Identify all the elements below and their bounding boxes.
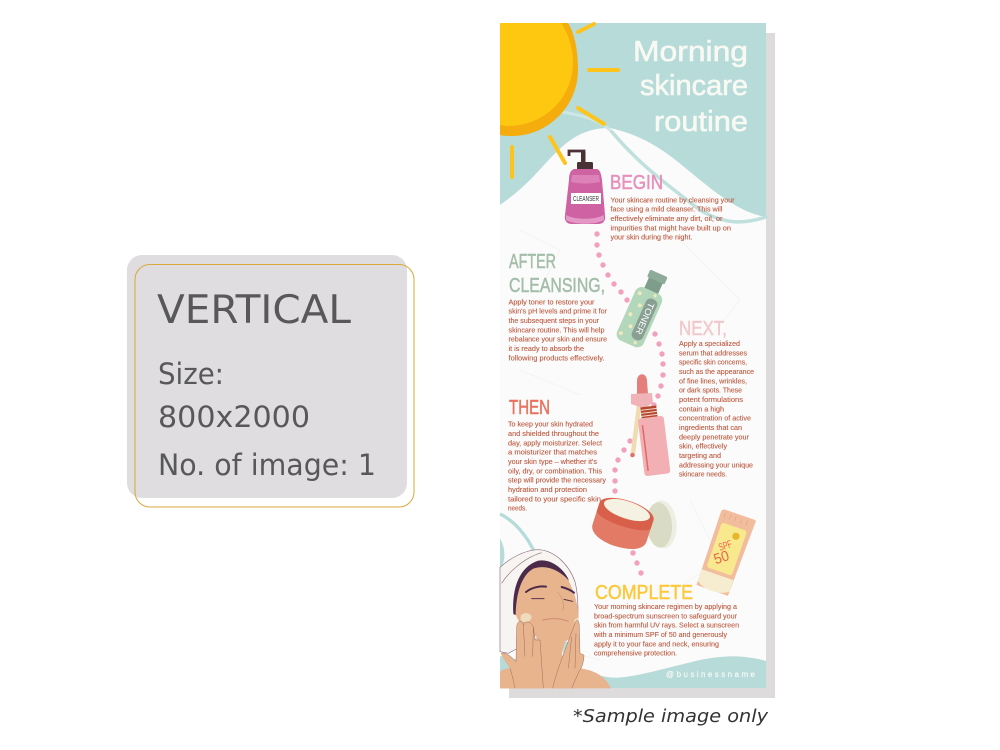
sun rays bbox=[512, 24, 618, 177]
next body text: skincare needs. bbox=[679, 470, 727, 479]
next body text: Apply a specialized bbox=[679, 339, 740, 348]
then body text: a moisturizer that matches bbox=[508, 448, 597, 457]
next body text: contain a high bbox=[679, 404, 724, 413]
towel bbox=[500, 550, 578, 653]
then body text: needs. bbox=[508, 504, 527, 513]
icon: serum dropper bottle bbox=[630, 374, 671, 476]
step: begin bbox=[610, 172, 735, 242]
card heading: VERTICAL bbox=[157, 288, 351, 333]
complete body text: with a minimum SPF of 50 and generously bbox=[593, 630, 727, 639]
panel shadow bbox=[509, 33, 775, 698]
icon: toner bottle: TONER bbox=[633, 301, 656, 337]
begin heading: BEGIN bbox=[610, 172, 663, 194]
left hand bbox=[500, 621, 543, 688]
then body text: day, apply moisturizer. Select bbox=[508, 438, 602, 447]
then body text: and shielded throughout the bbox=[508, 429, 599, 438]
card background bbox=[127, 255, 407, 498]
icon: SPF 50 sunscreen tube bbox=[696, 509, 756, 597]
begin body text: face using a mild cleanser. This will bbox=[610, 205, 723, 214]
paper creases bbox=[520, 230, 740, 660]
after cleansing body text: skincare routine. This will help bbox=[508, 325, 604, 334]
panel paper background bbox=[500, 23, 766, 688]
icon: SPF 50 sunscreen tube: 50 bbox=[712, 548, 731, 568]
title: Morning bbox=[633, 36, 748, 68]
after cleansing body text: the subsequent steps in your bbox=[508, 316, 600, 325]
icon: SPF 50 sunscreen tube: SPF bbox=[717, 538, 734, 554]
after cleansing heading: AFTER bbox=[509, 251, 556, 273]
title bbox=[633, 36, 748, 138]
next body text: deeply penetrate your bbox=[679, 432, 750, 441]
after cleansing heading: CLEANSING, bbox=[509, 275, 605, 297]
complete body text: skin from harmful UV rays. Select a sunscreen bbox=[594, 621, 739, 630]
complete body text: comprehensive protection. bbox=[594, 649, 677, 658]
next body text: concentration of active bbox=[679, 414, 751, 423]
after cleansing body text: Apply toner to restore your bbox=[508, 297, 595, 306]
complete heading: COMPLETE bbox=[595, 582, 693, 604]
after cleansing body text: skin's pH levels and prime it for bbox=[508, 307, 608, 316]
step: next bbox=[679, 318, 754, 479]
card gold outline bbox=[135, 264, 414, 507]
size value: 800x2000 bbox=[158, 400, 310, 434]
title: skincare bbox=[640, 70, 748, 102]
left hand lines bbox=[501, 621, 543, 688]
dotted path bbox=[594, 231, 666, 576]
step: after cleansing bbox=[508, 251, 608, 362]
begin body text bbox=[610, 195, 735, 242]
size label: Size: bbox=[158, 357, 224, 391]
complete body text: apply it to your face and neck, ensuring bbox=[594, 639, 719, 648]
complete body text: Your morning skincare regimen by applying a bbox=[594, 602, 737, 611]
begin body text: effectively eliminate any dirt, oil, or bbox=[610, 214, 723, 223]
next body text: targeting and bbox=[679, 451, 721, 460]
next body text: skin, effectively bbox=[679, 442, 727, 451]
title: routine bbox=[654, 106, 748, 138]
begin body text: your skin during the night. bbox=[610, 233, 692, 242]
next body text: addressing your unique bbox=[679, 460, 753, 469]
image count: No. of image: 1 bbox=[158, 448, 376, 482]
left teal side bbox=[500, 538, 504, 570]
sun inner disc bbox=[500, 23, 573, 126]
complete body text bbox=[593, 602, 739, 658]
step: complete bbox=[593, 582, 739, 658]
hair bbox=[513, 560, 569, 615]
step: then bbox=[508, 397, 606, 513]
neck and shoulders bbox=[500, 635, 611, 688]
sky teal area bbox=[500, 23, 766, 217]
after cleansing heading bbox=[509, 251, 605, 297]
sun bbox=[500, 23, 618, 177]
cream patches bbox=[521, 613, 578, 625]
next body text: or dark spots. These bbox=[679, 386, 742, 395]
next body text: such as the appearance bbox=[679, 367, 754, 376]
next body text: of fine lines, wrinkles, bbox=[679, 376, 747, 385]
right hand lines bbox=[553, 620, 584, 688]
teal gap beside neck bbox=[563, 642, 569, 658]
illustration: woman applying sunscreen bbox=[500, 514, 611, 688]
after cleansing body text: rebalance your skin and ensure bbox=[508, 335, 607, 344]
begin body text: impurities that might have built up on bbox=[610, 223, 731, 232]
flowing ribbon bbox=[563, 112, 766, 222]
face bbox=[515, 565, 578, 643]
bottom teal wave bbox=[500, 656, 766, 688]
then body text: oily, dry, or combination. This bbox=[508, 466, 602, 475]
sun outer disc bbox=[500, 23, 578, 136]
then body text bbox=[508, 420, 606, 513]
sample image caption: *Sample image only bbox=[573, 706, 768, 727]
then heading: THEN bbox=[509, 397, 550, 419]
then body text: tailored to your specific skin bbox=[508, 494, 601, 503]
left teal arc bbox=[500, 514, 535, 553]
complete body text: broad-spectrum sunscreen to safeguard your bbox=[594, 611, 738, 620]
next heading: NEXT, bbox=[679, 318, 727, 340]
then body text: step will provide the necessary bbox=[508, 476, 606, 485]
after cleansing body text: following products effectively. bbox=[508, 353, 604, 362]
facial features bbox=[526, 586, 574, 621]
towel fold bbox=[502, 553, 542, 583]
icon: cleanser pump bottle bbox=[565, 151, 605, 224]
next body text: serum that addresses bbox=[679, 348, 747, 357]
icon: cleanser pump bottle: CLEANSER bbox=[573, 196, 599, 203]
next body text: specific skin concerns, bbox=[679, 358, 747, 367]
begin body text: Your skincare routine by cleansing your bbox=[610, 195, 735, 204]
then body text: hydration and protection bbox=[508, 485, 587, 494]
then body text: your skin type – whether it's bbox=[508, 457, 597, 466]
right hand bbox=[553, 620, 584, 688]
after cleansing body text bbox=[508, 297, 608, 362]
next body text bbox=[679, 339, 754, 479]
icon: cream jar with lid bbox=[588, 492, 678, 555]
infographic panel bbox=[500, 23, 766, 688]
next body text: potent formulations bbox=[679, 395, 743, 404]
after cleansing body text: it is ready to absorb the bbox=[508, 344, 584, 353]
then body text: To keep your skin hydrated bbox=[508, 420, 593, 429]
next body text: ingredients that can bbox=[679, 423, 742, 432]
info card: vertical format bbox=[127, 255, 414, 507]
icon: toner bottle bbox=[614, 267, 672, 350]
business handle: @businessname bbox=[666, 670, 756, 679]
